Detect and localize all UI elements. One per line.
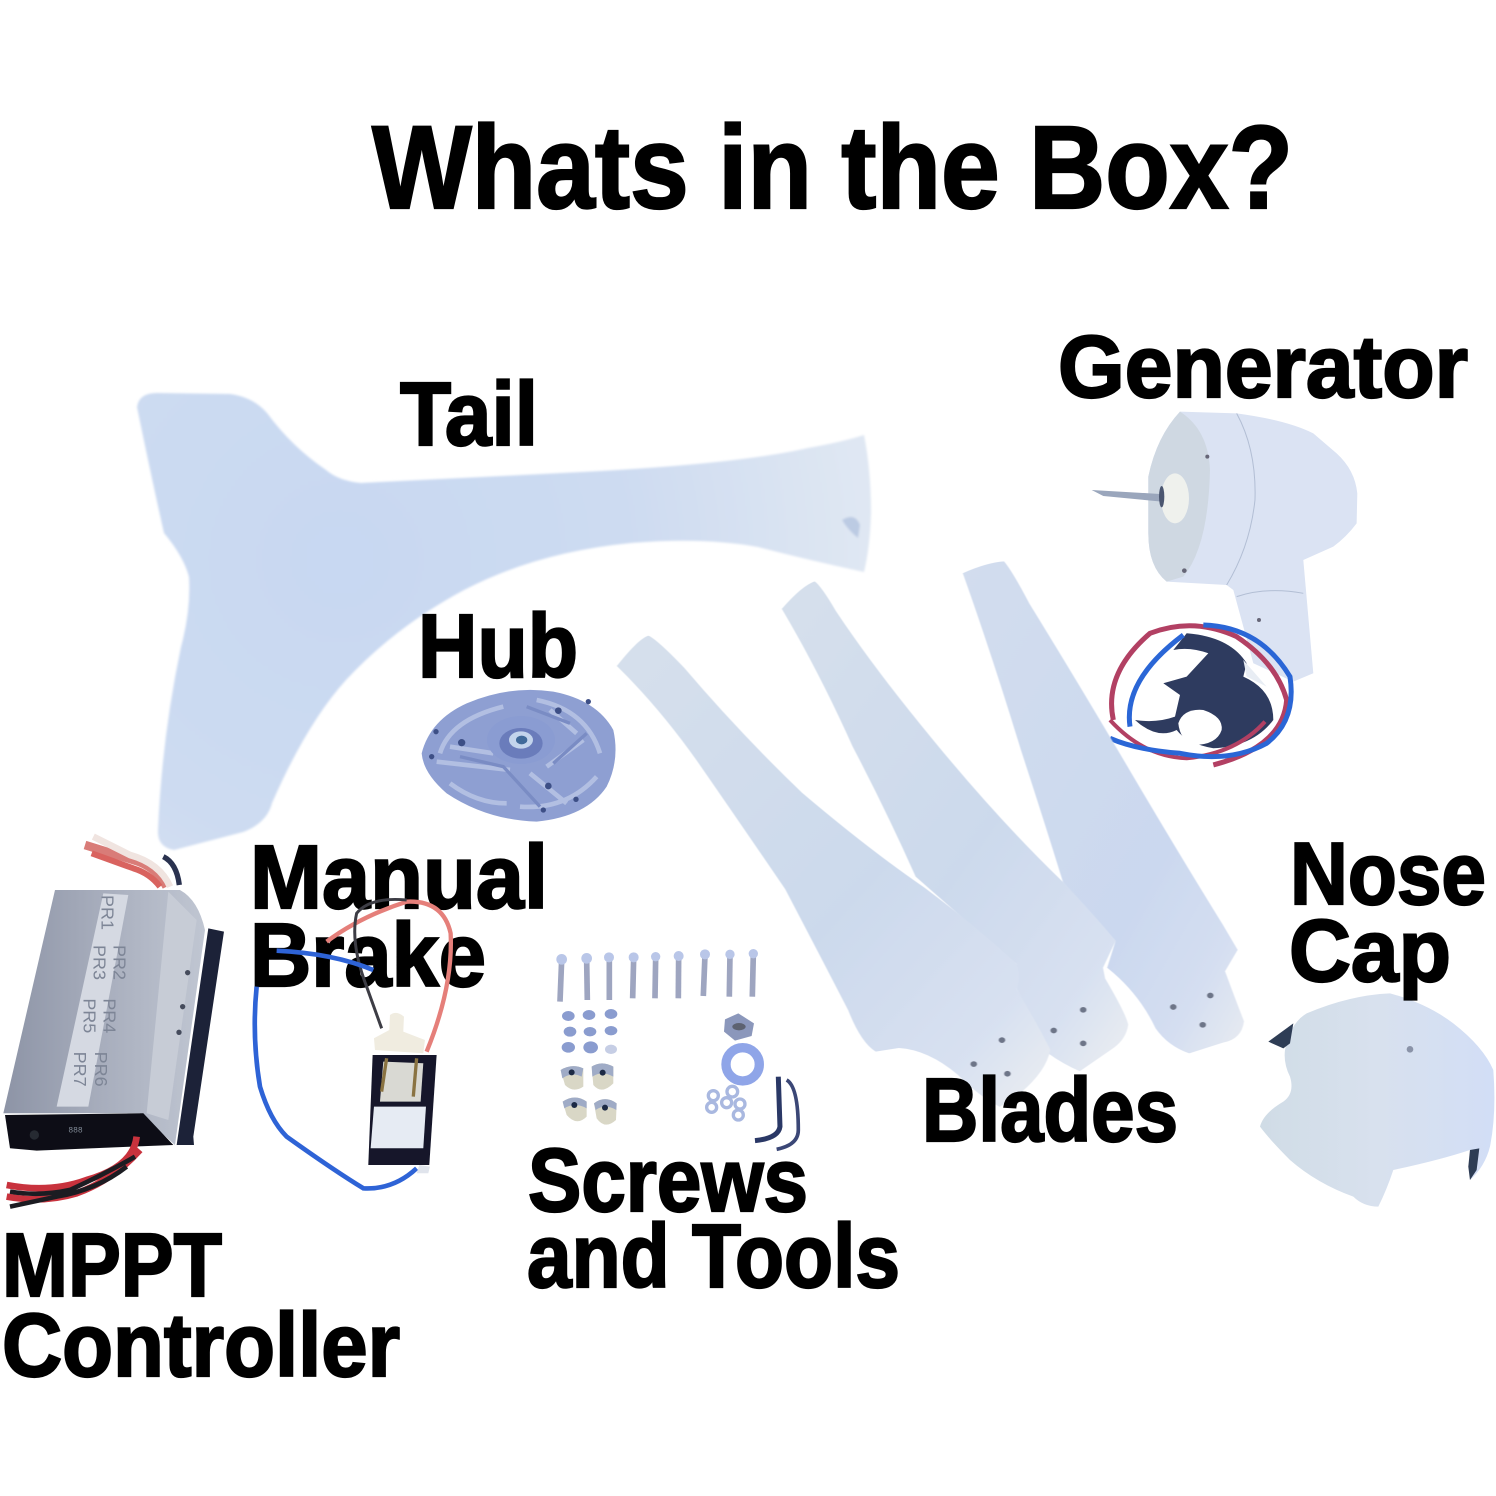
illustration: MPPT controller: PR4 — [99, 998, 119, 1033]
bolts — [560, 955, 753, 1002]
label: MPPT controller: Controller — [2, 1296, 400, 1396]
illustration: MPPT controller: PR2 — [109, 945, 129, 980]
illustration: three blades — [617, 561, 1244, 1107]
label: MPPT controller: MPPT — [2, 1216, 222, 1316]
label: screws and tools — [527, 1131, 900, 1307]
illustration: nose cap — [1260, 993, 1494, 1207]
small washers — [707, 1086, 745, 1120]
blade 1 — [617, 636, 1050, 1107]
illustration: manual brake switch — [255, 899, 451, 1188]
label: blades: Blades — [922, 1061, 1178, 1161]
label: tail: Tail — [400, 365, 538, 465]
illustration: MPPT controller: PR6 — [91, 1052, 111, 1087]
blade 3 — [963, 561, 1244, 1053]
label: screws and tools: Screws — [528, 1131, 808, 1231]
label: manual brake: Manual — [250, 828, 548, 928]
illustration: MPPT controller: 888 — [68, 1126, 83, 1135]
large nut and washer — [724, 1013, 754, 1041]
illustration: MPPT controller: PR3 — [89, 945, 109, 980]
illustration: MPPT controller: PR5 — [79, 998, 99, 1033]
label: hub: Hub — [418, 597, 578, 697]
illustration: screws and tools — [556, 949, 798, 1149]
small nuts — [562, 1009, 617, 1054]
label: nose cap — [1289, 824, 1486, 1000]
label: MPPT controller — [2, 1216, 400, 1396]
illustration: hub plate — [422, 690, 616, 822]
illustration: MPPT controller: PR1 — [98, 895, 118, 930]
hex keys — [755, 1077, 780, 1141]
wing nuts — [561, 1063, 617, 1125]
title: Whats in the Box? — [372, 102, 1293, 234]
illustration: tail fin — [137, 393, 871, 850]
generator wire bundle — [1110, 625, 1291, 765]
illustration: generator — [1092, 412, 1357, 765]
label: nose cap: Cap — [1289, 901, 1451, 1000]
illustration: MPPT controller — [3, 837, 224, 1207]
label: manual brake — [250, 828, 548, 1006]
illustration: MPPT controller: PR7 — [70, 1052, 90, 1087]
label: screws and tools: and Tools — [527, 1207, 900, 1307]
label: generator: Generator — [1058, 317, 1468, 416]
label: manual brake: Brake — [250, 906, 486, 1006]
blade 2 — [782, 581, 1128, 1071]
